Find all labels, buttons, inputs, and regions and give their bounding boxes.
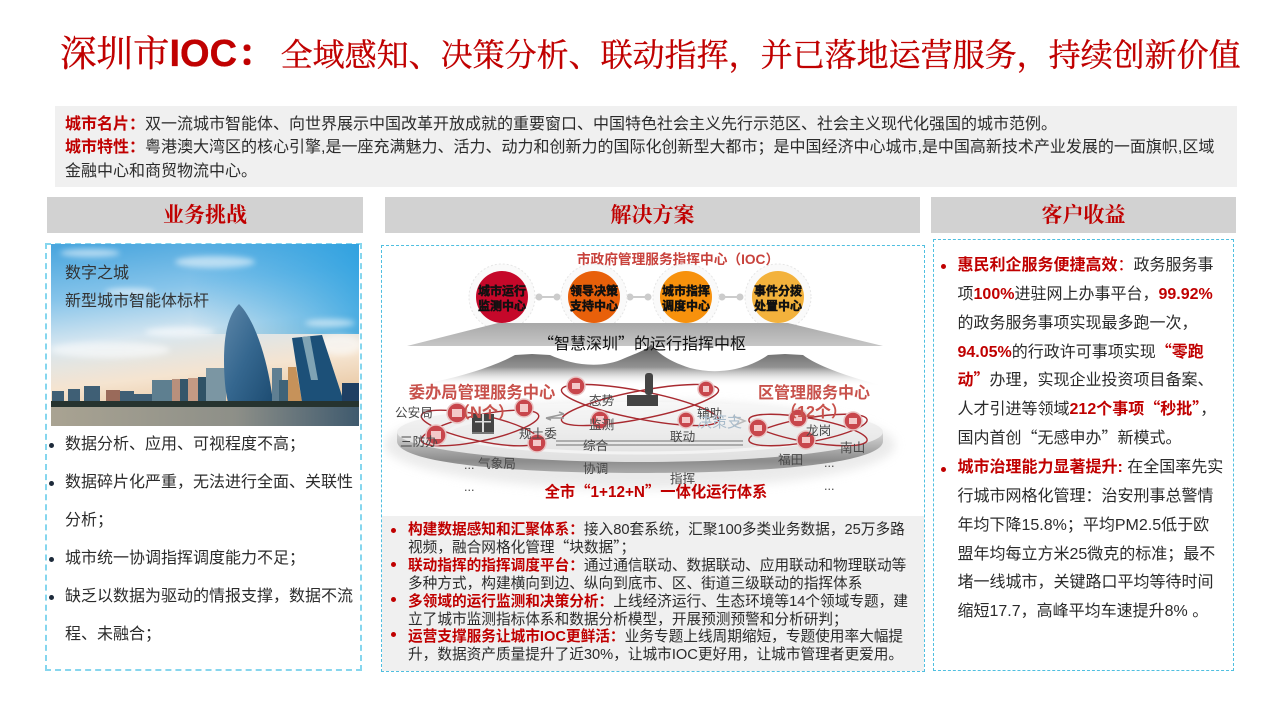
text: node labels: 公安局 (395, 406, 433, 420)
text: city governance benefit (941, 458, 1223, 620)
bullet list: challenges: 数据分析、应用、可视程度不高； (65, 436, 305, 453)
text: node labels: 指挥 (670, 472, 696, 486)
text: city governance benefit: 行城市网格化管理：治安刑事总警情 (958, 488, 1214, 505)
bullet list: challenges: 缺乏以数据为驱动的情报支撑，数据不流 (65, 588, 353, 605)
text: node labels: 综合 (583, 439, 609, 453)
text: operations support: 运营支撑服务让城市IOC更鲜活：业务专题上线周期缩短，专题使用率大幅提 (408, 629, 903, 645)
shape: platform disc (385, 401, 895, 489)
diagram: smart Shenzhen command structure (385, 251, 895, 502)
heading: solution: 解决方案 (610, 203, 694, 227)
group: four center nodes: 城市运行 (478, 283, 526, 298)
icon: left district loops (419, 403, 541, 453)
text: new smart city benchmark: 新型城市智能体标杆 (65, 293, 209, 310)
image: Shenzhen skyline photo (51, 244, 359, 426)
text: city governance benefit: 年均下降15.8%；平均PM2.5低于欧 (958, 517, 1209, 534)
bullet list: challenges: 程、未融合； (65, 626, 161, 643)
panel: business challenges (45, 243, 362, 671)
panel: solution details: 多种方式，构建横向到边、纵向到底市、区、街道三级联动的指挥体系 (408, 576, 862, 592)
text: convenient services benefit: 项100%进驻网上办事平台，99.92% (958, 286, 1213, 303)
text: city characteristics continued: 金融中心和商贸物流中心。 (65, 163, 257, 180)
text: convenient services benefit: 国内首创“无感申办”新模式。 (958, 424, 1182, 448)
icon: left building (472, 414, 494, 434)
text: node labels (395, 393, 865, 494)
heading: business challenges: 业务挑战 (163, 203, 247, 227)
group: four center nodes: 支持中心 (570, 298, 618, 313)
text: digital city: 数字之城 (65, 265, 129, 282)
icon: right district loops (747, 408, 869, 452)
group: four center nodes: 处置中心 (754, 298, 802, 313)
bullet list: challenges: 分析； (65, 512, 113, 529)
text: commission service centre: （N个） (454, 404, 514, 422)
group: four center nodes: 监测中心 (478, 298, 526, 313)
bullet list: challenges: 城市统一协调指挥调度能力不足； (65, 550, 305, 567)
text: district service centre: 区管理服务中心 (758, 383, 870, 402)
text: node labels: 联动 (670, 430, 695, 444)
text: district service centre (758, 383, 870, 421)
arrows: exchange between centres (546, 412, 745, 445)
text: city characteristics: 城市特性：粤港澳大湾区的核心引擎,是一座充满魅力、活力、动力和创新力的国际化创新型大都市；是中国经济中心城市,是中国高新技术产业发展的一面旗帜,区域 (65, 139, 1214, 156)
text: convenient services benefit: 的政务服务事项实现最多跑一次， (958, 315, 1198, 332)
text: node labels: ... (824, 456, 834, 470)
heading: solution (385, 197, 920, 233)
shape: command hub trapezoid (407, 323, 883, 346)
text: city governance benefit: 盟年均每立方米25微克的标准；最不 (958, 546, 1215, 563)
text: convenient services benefit: 94.05%的行政许可事项实现“零跑 (958, 338, 1204, 362)
group: four center nodes: 事件分拨 (754, 283, 802, 298)
text: node labels: 三防办 (400, 434, 438, 449)
title: 深圳市IOC：全域感知、决策分析、联动指挥，并已落地运营服务，持续创新价值 (60, 33, 1241, 75)
group: four center nodes: 调度中心 (662, 298, 710, 313)
group: four center nodes: 领导决策 (570, 283, 618, 298)
text: commission service centre (409, 383, 555, 422)
icon: central tower (627, 373, 658, 406)
text: node labels: 龙岗 (806, 424, 831, 438)
panel: solution details: 立了城市监测指标体系和数据分析模型，开展预测预警和分析研判； (408, 612, 848, 628)
text: node labels: ... (824, 479, 834, 493)
text: node labels: ... (464, 458, 474, 472)
heading: customer benefits: 客户收益 (1042, 203, 1126, 227)
panel: customer benefits (933, 239, 1234, 671)
panel: solution details: 升，数据资产质量提升了近30%，让城市IOC更好用，让城市管理者更爱用。 (408, 647, 903, 663)
text: convenient services benefit: 动”办理，实现企业投资项目备案、 (958, 366, 1214, 390)
text: node labels: ... (464, 480, 474, 494)
text: node labels: 决策支 (697, 414, 742, 431)
text: node labels: 监测 (589, 418, 614, 432)
text: command hub label: “智慧深圳”的运行指挥中枢 (538, 330, 746, 354)
text: city card: 城市名片：双一流城市智能体、向世界展示中国改革开放成就的重要窗口、中国特色社会主义先行示范区、社会主义现代化强国的城市范例。 (65, 116, 1057, 133)
text: convenient services benefit: 人才引进等领域212个事项“秒批”， (958, 395, 1216, 419)
text: multi domain analysis: 多领域的运行监测和决策分析：上线经济运行、生态环境等14个领域专题，建 (408, 594, 908, 610)
text: district service centre: （12个） (781, 403, 847, 421)
text: convenient services benefit: 惠民利企服务便捷高效：政务服务事 (958, 257, 1214, 274)
text: node labels: 南山 (840, 440, 865, 455)
bullet list: challenges (49, 435, 353, 643)
text: city governance benefit: 缩短17.7，高峰平均车速提升8% 。 (958, 603, 1208, 620)
heading: business challenges (47, 197, 363, 233)
bullet list: challenges: 数据碎片化严重，无法进行全面、关联性 (65, 474, 353, 491)
heading: customer benefits (931, 197, 1236, 233)
text: commission service centre: 委办局管理服务中心 (409, 383, 555, 402)
text: city governance benefit: 城市治理能力显著提升: 在全国率先实 (958, 459, 1223, 476)
panel: city introduction (55, 106, 1237, 187)
text: city IOC title: 市政府管理服务指挥中心（IOC） (577, 251, 779, 267)
group: four center nodes: 城市指挥 (662, 283, 710, 298)
text: node labels: 协调 (583, 462, 608, 476)
icon: badge glyphs (431, 383, 857, 446)
icon: middle loops (559, 376, 721, 434)
text: linkage command: 联动指挥的指挥调度平台：通过通信联动、数据联动、应用联动和物理联动等 (408, 558, 906, 574)
text: node labels: 规土委 (519, 426, 557, 441)
text: node labels: 辅助 (697, 407, 722, 421)
panel: solution details: 视频，融合网格化管理“块数据”； (408, 536, 635, 557)
text: data perception: 构建数据感知和汇聚体系：接入80套系统，汇聚100多类业务数据，25万多路 (408, 522, 905, 538)
text: integrated system: 全市“1+12+N”一体化运行体系 (545, 480, 767, 502)
panel: solution details (382, 516, 924, 671)
text: city governance benefit: 堵一线城市，关键路口平均等待时间 (958, 574, 1214, 591)
text: node labels: 态势 (589, 393, 615, 408)
text: convenient services benefit (941, 256, 1216, 448)
text: node labels: 福田 (778, 453, 803, 467)
icon: node badges (426, 377, 862, 452)
text: node labels: 气象局 (478, 456, 516, 471)
group: four center nodes (469, 264, 811, 330)
shape: upward fan arrows (412, 344, 884, 386)
panel: solution (381, 245, 925, 672)
